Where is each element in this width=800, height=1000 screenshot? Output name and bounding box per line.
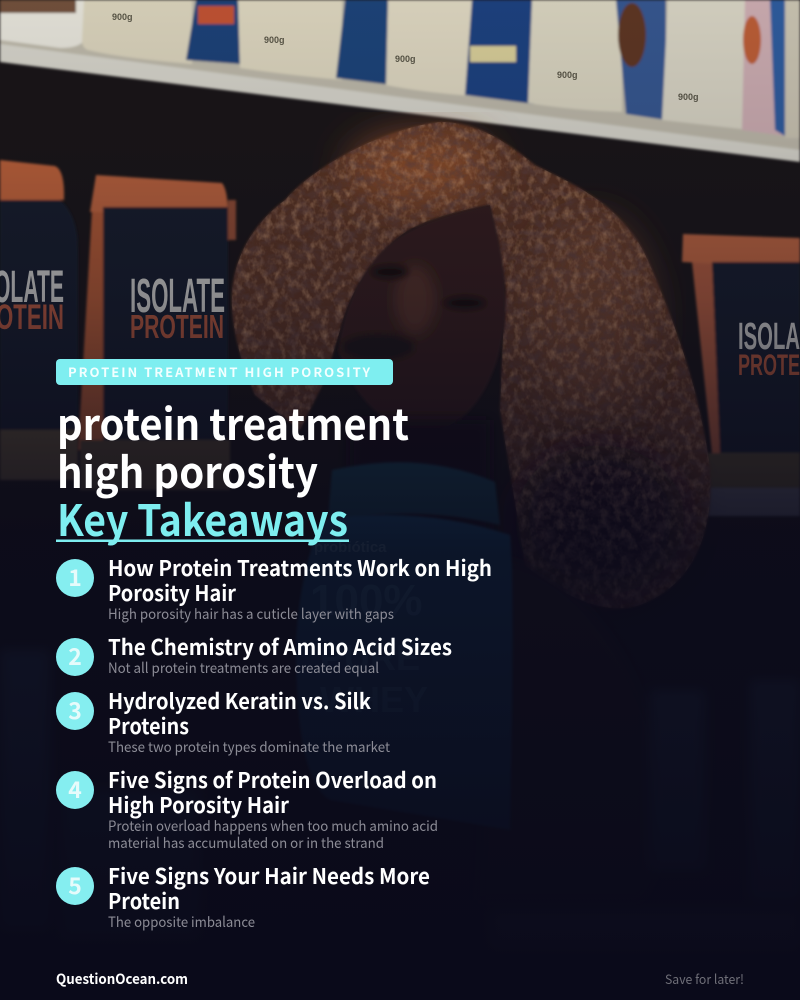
pouch 5	[662, 0, 750, 130]
pack label text: 900g	[264, 35, 285, 45]
takeaway 2: The Chemistry of Amino Acid Sizes	[108, 631, 452, 662]
takeaway 5: 5	[68, 867, 82, 901]
pack label text: 900g	[678, 92, 699, 102]
takeaway 1: High porosity hair has a cuticle layer with gaps	[108, 604, 394, 624]
category badge: PROTEIN TREATMENT HIGH POROSITY	[68, 362, 370, 381]
pouch 4	[528, 0, 622, 112]
tub label: WHEY	[320, 679, 428, 720]
tub label	[310, 539, 428, 720]
white tub	[0, 0, 84, 48]
takeaway 3: These two protein types dominate the market	[108, 737, 391, 757]
takeaway 5	[56, 860, 430, 932]
pack label text	[112, 12, 699, 102]
second bottle label: PROTEIN	[130, 308, 224, 345]
takeaway 3: Proteins	[108, 710, 189, 741]
key takeaways subtitle: Key Takeaways	[57, 487, 348, 549]
takeaway 3	[56, 685, 391, 757]
takeaway 4: Protein overload happens when too much amino acid	[108, 816, 438, 836]
blue pouch 2	[336, 0, 392, 85]
lower shelf products	[0, 650, 800, 950]
takeaway 1	[56, 552, 492, 624]
pink printed pouch	[742, 0, 785, 136]
pouch 3	[386, 0, 472, 96]
pack label text: 900g	[395, 54, 416, 64]
takeaway 1: Porosity Hair	[108, 577, 237, 608]
blue pouch 1	[186, 0, 240, 64]
tub label: 100%	[310, 576, 423, 625]
takeaway 5: Five Signs Your Hair Needs More	[108, 860, 430, 891]
pouch 2	[238, 0, 342, 80]
title: protein treatment	[57, 391, 409, 453]
takeaway 4: Five Signs of Protein Overload on	[108, 764, 437, 795]
shelf board	[0, 40, 800, 162]
right bottle	[682, 234, 800, 516]
shoulder	[480, 560, 666, 900]
second bottle	[78, 175, 236, 490]
takeaway 4	[56, 764, 438, 853]
printed pouch	[616, 0, 666, 120]
takeaway 1: 1	[68, 559, 82, 593]
blue pouch 3	[465, 0, 534, 104]
left bottle	[0, 160, 78, 480]
right bottle label	[738, 316, 800, 382]
takeaway list	[56, 552, 492, 932]
takeaway 1: How Protein Treatments Work on High	[108, 552, 492, 583]
title	[56, 391, 409, 549]
takeaway 3: Hydrolyzed Keratin vs. Silk	[108, 685, 371, 716]
footer brand: QuestionOcean.com	[56, 969, 188, 989]
category badge	[56, 359, 393, 385]
takeaway 4: 4	[68, 771, 82, 805]
takeaway 4: material has accumulated on or in the strand	[108, 833, 384, 853]
upper shelf with supplement packages	[0, 0, 800, 162]
takeaway 2: 2	[68, 638, 82, 672]
blue protein tub	[296, 462, 512, 830]
woman's face and neck	[338, 205, 506, 560]
tub label: PURE	[320, 637, 420, 678]
takeaway 2	[56, 631, 452, 678]
takeaway 5: The opposite imbalance	[108, 912, 255, 932]
pack label text: 900g	[112, 12, 133, 22]
left bottle label	[0, 261, 64, 337]
takeaway 2: Not all protein treatments are created equal	[108, 658, 379, 678]
footer save note: Save for later!	[665, 969, 744, 988]
takeaway 5: Protein	[108, 885, 180, 916]
second bottle label	[130, 270, 225, 345]
title: high porosity	[57, 439, 318, 501]
takeaway 3: 3	[68, 692, 82, 726]
pack label text: 900g	[557, 70, 578, 80]
background photo: ISOLATE	[130, 270, 225, 323]
takeaway 4: High Porosity Hair	[108, 789, 290, 820]
woman's hair	[232, 122, 711, 608]
tub label: probiótica	[314, 539, 387, 556]
pouch 1	[82, 0, 192, 64]
